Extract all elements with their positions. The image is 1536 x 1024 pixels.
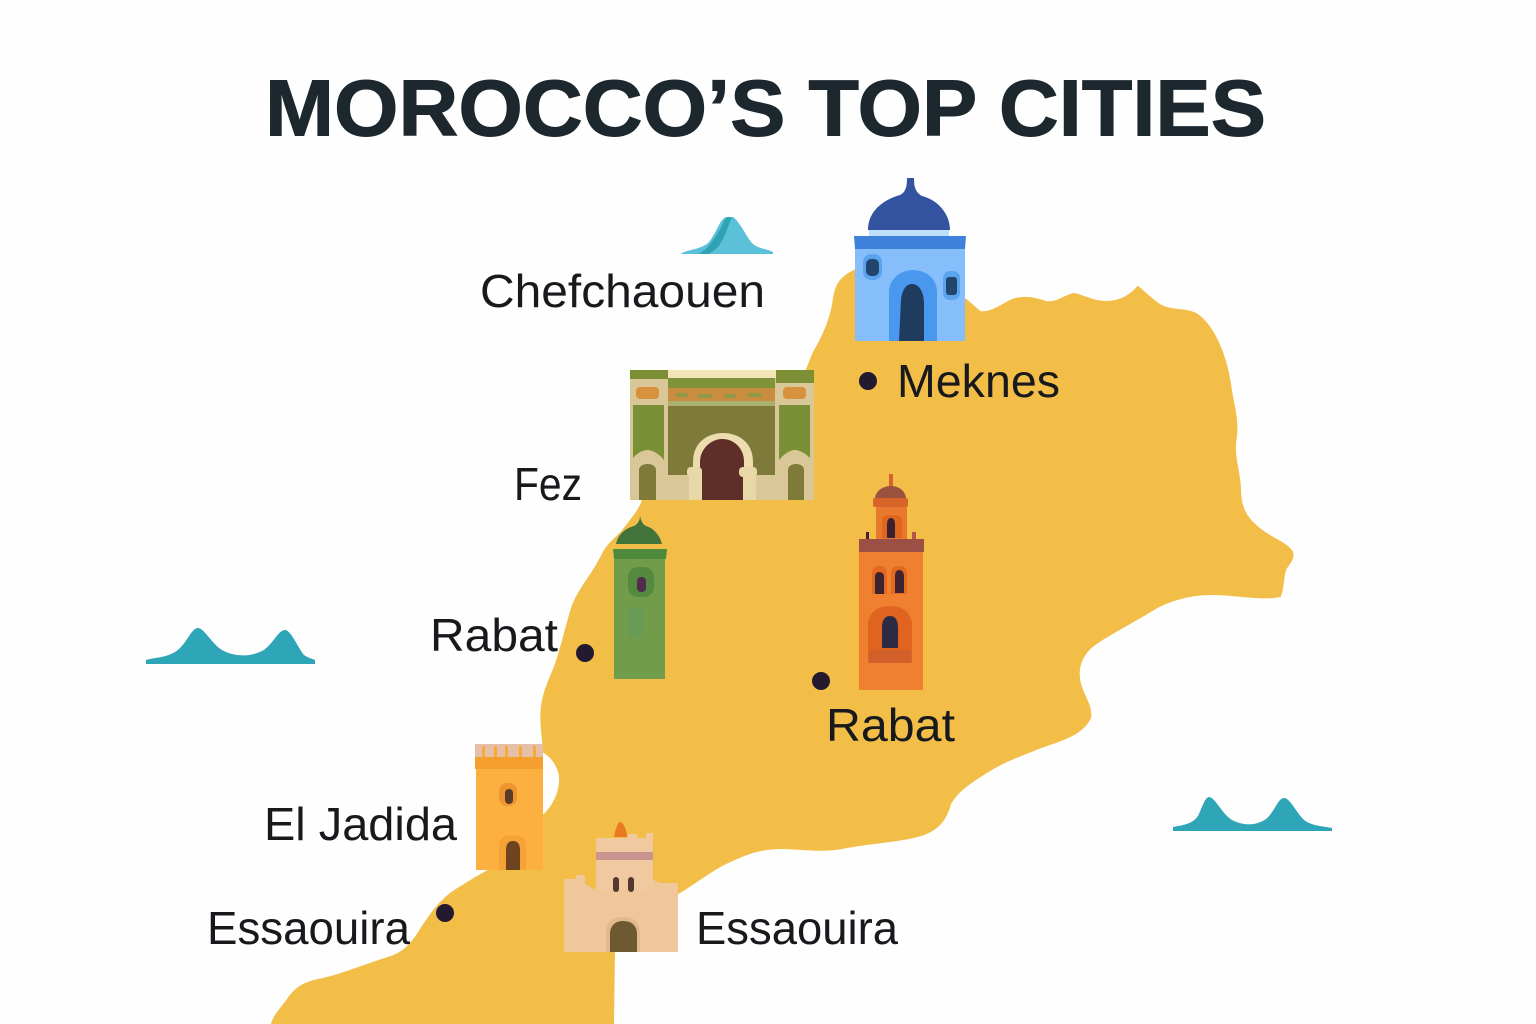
window [628,567,654,597]
upper tower [876,507,907,539]
building: Fez gate [630,370,814,500]
side niches [639,464,656,500]
large niche [868,606,912,663]
blue dome [868,178,950,230]
building: Chefchaouen blue house [854,178,966,341]
icon: teal wave left [146,628,315,664]
cornice [613,549,667,559]
gate base [630,370,814,500]
label: Essaouira west: Essaouira [207,902,410,954]
icon: teal wave right [1173,797,1332,831]
tower body [614,559,665,679]
paired windows [872,566,887,594]
dome [875,486,906,498]
door arch [693,433,753,500]
marker: Rabat east [812,672,830,690]
marker: Rabat west [576,644,594,662]
label: Rabat east: Rabat [826,699,955,751]
windows [613,877,619,892]
title: MOROCCO’S TOP CITIES [265,64,1266,152]
building: El Jadida tower [475,744,543,870]
band [475,757,543,769]
flame finial [614,822,627,837]
upper keep [596,833,653,890]
side panels [633,405,664,460]
columns [689,470,702,500]
building: green minaret [613,516,667,679]
building: Essaouira fortress [564,822,678,952]
building: orange minaret [859,474,924,690]
cornice [854,236,966,249]
door [499,835,526,870]
green dome [616,516,662,544]
arched doorway [889,270,937,341]
label: Fez: Fez [514,458,582,510]
label: Chefchaouen: Chefchaouen [480,265,765,317]
marker: Meknes [859,372,877,390]
tower body [859,552,923,690]
map of Morocco [272,270,1293,1024]
label: Essaouira east: Essaouira [696,902,898,954]
label: Meknes: Meknes [897,355,1060,407]
icon: light blue mountain [681,217,773,254]
top trim [630,370,668,379]
central wall [668,406,775,475]
lower wall [564,875,678,952]
finial [889,474,893,488]
crenellations [475,744,543,757]
house body [855,249,965,341]
marker: Essaouira [436,904,454,922]
label: El Jadida: El Jadida [264,798,457,850]
door [606,917,640,952]
frieze [668,378,775,388]
cornice [859,539,924,552]
tower body [476,769,543,870]
window [499,783,517,806]
parapets [866,532,869,540]
label: Rabat west: Rabat [430,609,558,661]
windows [863,254,882,280]
